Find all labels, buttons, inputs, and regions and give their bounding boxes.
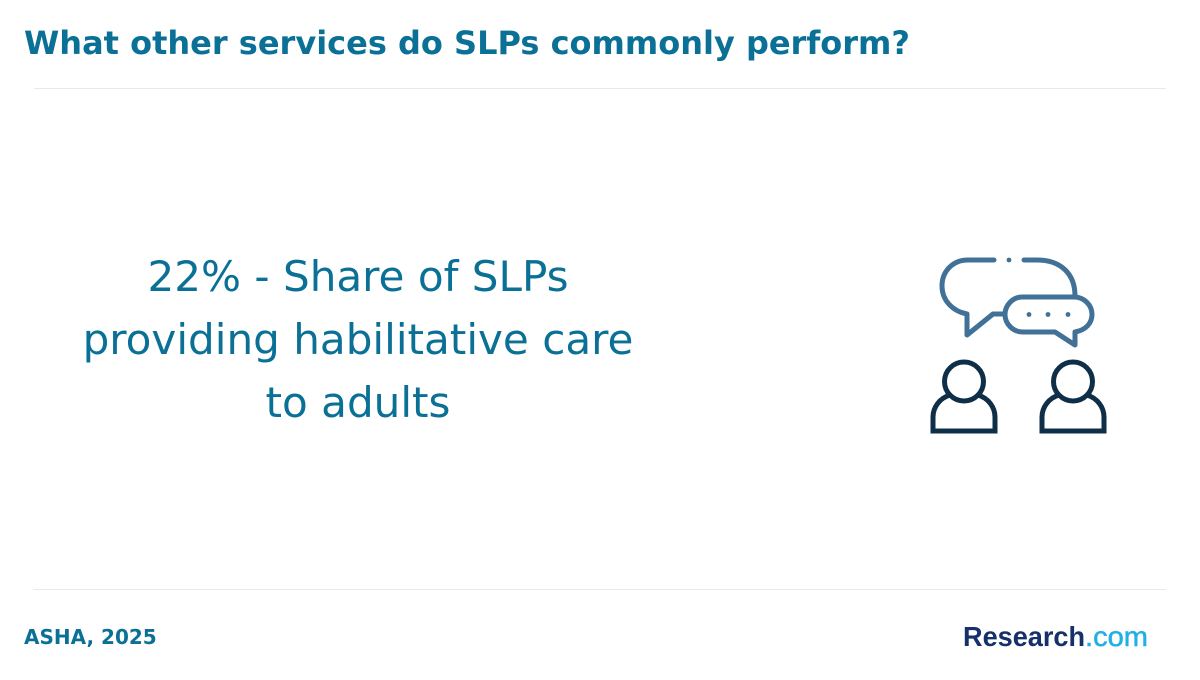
icon: large speech bubble — [942, 258, 1075, 335]
icon: small speech bubble — [1005, 297, 1092, 345]
main statistic text — [83, 252, 633, 427]
icon: two people talking with speech bubbles — [930, 258, 1106, 434]
icon: right person — [1042, 362, 1104, 431]
logo: Research.com — [963, 621, 1148, 652]
logo: Research.com: .com — [1085, 621, 1148, 652]
main statistic text: 22% - Share of SLPs — [147, 252, 569, 301]
main statistic text: to adults — [266, 378, 450, 427]
title: What other services do SLPs commonly perform? — [24, 24, 910, 62]
logo: Research.com: Research — [963, 621, 1085, 652]
icon: left person — [933, 362, 995, 431]
main statistic text: providing habilitative care — [83, 315, 633, 364]
source: ASHA, 2025 — [24, 625, 157, 649]
